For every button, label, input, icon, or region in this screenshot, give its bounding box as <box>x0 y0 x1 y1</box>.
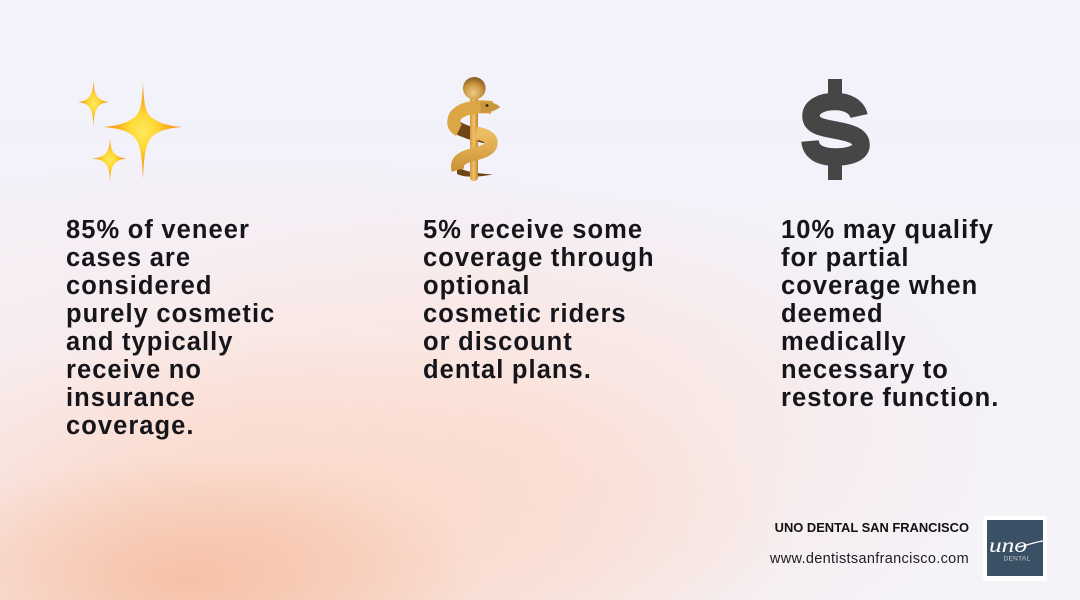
text: medically necessary statistic: deemed <box>781 300 884 328</box>
text: cosmetic veneers statistic: 85% of veneer <box>66 216 250 244</box>
text: cosmetic veneers statistic: receive no <box>66 356 202 384</box>
footer: practice name: UNO DENTAL SAN FRANCISCO <box>775 520 969 535</box>
text: cosmetic riders statistic: 5% receive some <box>423 216 643 244</box>
text: medically necessary statistic: necessary to <box>781 356 949 384</box>
text: medically necessary statistic: coverage when <box>781 272 978 300</box>
text: cosmetic veneers statistic: and typically <box>66 328 234 356</box>
text: cosmetic veneers statistic: purely cosmetic <box>66 300 275 328</box>
text: cosmetic veneers statistic: cases are <box>66 244 191 272</box>
icon: rod of Asclepius <box>447 77 500 181</box>
text: medically necessary statistic: medically <box>781 328 907 356</box>
text: cosmetic riders statistic <box>423 216 655 384</box>
text: medically necessary statistic: 10% may qualify <box>781 216 994 244</box>
logo: uno <box>989 533 1027 557</box>
icon: dollar sign <box>801 79 870 180</box>
text: cosmetic riders statistic: cosmetic riders <box>423 300 627 328</box>
text: cosmetic veneers statistic <box>66 216 275 440</box>
text: cosmetic veneers statistic: considered <box>66 272 213 300</box>
text: cosmetic riders statistic: coverage through <box>423 244 655 272</box>
text: medically necessary statistic: restore function. <box>781 384 999 412</box>
footer: website: www.dentistsanfrancisco.com <box>770 551 969 567</box>
text: cosmetic veneers statistic: coverage. <box>66 412 195 440</box>
icon: sparkles <box>78 80 182 182</box>
text: medically necessary statistic <box>781 216 999 412</box>
text: cosmetic riders statistic: dental plans. <box>423 356 592 384</box>
logo <box>983 516 1047 581</box>
text: medically necessary statistic: for partial <box>781 244 910 272</box>
logo: DENTAL <box>1004 556 1031 562</box>
text: cosmetic riders statistic: optional <box>423 272 531 300</box>
text: cosmetic veneers statistic: insurance <box>66 384 196 412</box>
text: cosmetic riders statistic: or discount <box>423 328 573 356</box>
